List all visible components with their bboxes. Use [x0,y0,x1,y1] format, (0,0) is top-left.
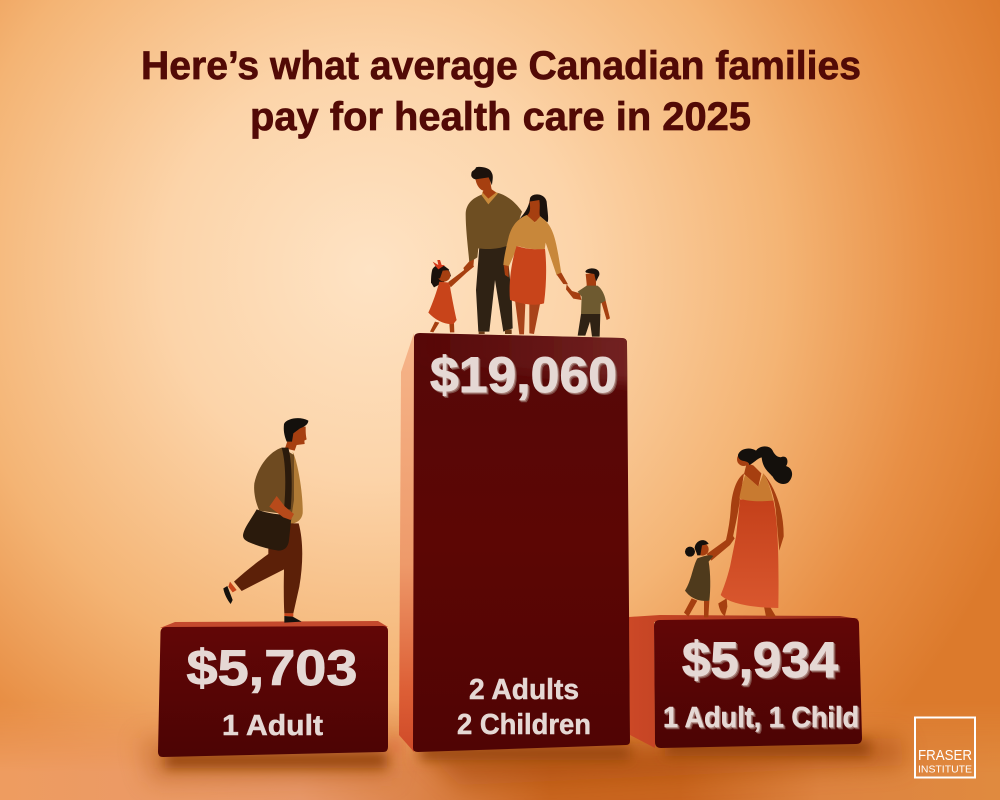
title: Here’s what average Canadian families [141,44,861,88]
title [141,44,861,139]
man's hair [284,418,308,442]
right bar: 1 adult, 1 child [629,615,862,748]
man's hand [269,496,294,520]
bar front [413,333,630,752]
mother's top [739,473,773,501]
floor [0,715,1000,800]
mother's head [737,453,750,466]
logo: Fraser Institute: FRASER [918,747,972,764]
label: 1 Adult: 1 Adult [222,710,323,742]
bar front [158,626,388,757]
bar top [160,621,388,628]
value: $5,703: $5,703 [186,640,358,696]
title: pay for health care in 2025 [250,95,751,139]
bar top sheen [486,334,628,387]
logo: Fraser Institute: INSTITUTE [918,764,972,776]
logo: Fraser Institute [915,718,975,778]
centre bar: 2 adults, 2 children [399,325,640,752]
mother's hair [738,446,792,484]
man's pants [234,523,302,613]
bar front [654,618,862,748]
value: $19,060: $19,060 [430,347,617,403]
mother's feet [718,598,776,617]
figure: family of four [428,167,610,337]
left bar: 1 adult [158,621,388,757]
figure: man walking with bag [223,418,308,623]
mother's dress [721,499,779,608]
child [684,535,735,617]
man's jacket [254,448,294,515]
bag strap [282,448,292,509]
figure: father [463,167,522,334]
man's shoes and socks [223,582,302,623]
label: 1 Adult, 1 Child: 1 Adult, 1 Child [663,702,859,734]
man's neck and face [285,427,307,451]
label: 2 Adults: 2 Adults [469,674,579,706]
figure: son [566,268,610,337]
mother's arms and neck [726,463,784,551]
bar side [399,333,414,752]
figure: mother and child [684,446,792,617]
value: $5,934: $5,934 [682,632,838,688]
label: 2 Children: 2 Children [457,709,591,741]
man's shirt [290,452,303,524]
floor shadows [140,736,905,785]
bar side and top [629,615,859,748]
man's bag [243,509,292,551]
figure: mother [503,194,568,334]
figure: daughter [428,260,474,332]
